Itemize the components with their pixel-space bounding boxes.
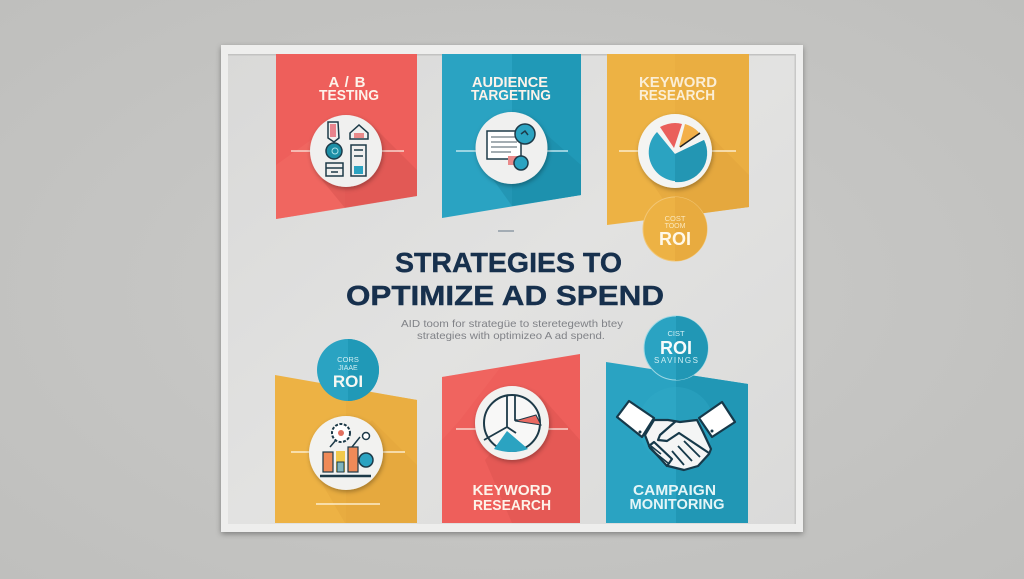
heading: A/B testing: A / B: [328, 74, 366, 91]
badge: ROI bottom left: JIAAE: [338, 365, 358, 372]
subtitle text: [401, 318, 624, 342]
poster frame: [221, 45, 803, 532]
panel: campaign monitoring: [606, 362, 748, 523]
badge: ROI top: [643, 197, 707, 261]
badge: ROI bottom left: CORS: [337, 355, 359, 364]
panel: A/B testing: [276, 54, 417, 219]
heading: keyword research bottom: RESEARCH: [473, 497, 551, 514]
title: STRATEGIES TO: [395, 247, 622, 278]
icon: segmented pie: [475, 386, 549, 460]
badge: ROI top: COST: [665, 214, 686, 223]
title: [346, 247, 664, 311]
panel: bottom yellow: [275, 375, 417, 523]
panel: audience targeting: [442, 54, 581, 218]
small tick above title: [498, 230, 514, 232]
heading: A/B testing: TESTING: [319, 87, 379, 104]
heading: campaign monitoring: MONITORING: [630, 496, 724, 513]
badge: ROI bottom left: [317, 339, 379, 401]
subtitle text: strategies with optimizeo A ad spend.: [417, 330, 605, 342]
heading: A/B testing: [319, 74, 379, 104]
heading: audience targeting: TARGETING: [471, 87, 551, 104]
icon: handshake: [617, 401, 735, 470]
subtitle text: AID toom for strategüe to steretegewth btey: [401, 318, 624, 330]
heading: audience targeting: [471, 74, 551, 104]
title: OPTIMIZE AD SPEND: [346, 280, 664, 311]
badge: ROI savings: [644, 316, 708, 380]
heading: audience targeting: AUDIENCE: [472, 74, 548, 91]
icon: pie chart: [638, 114, 712, 188]
badge: ROI top: ROI: [659, 229, 691, 249]
panel: keyword research bottom: [442, 354, 580, 523]
badge: ROI savings: CIST: [667, 329, 685, 338]
heading: keyword research bottom: [472, 482, 552, 514]
badge: ROI savings: SAVINGS: [654, 356, 698, 365]
badge: ROI bottom left: ROI: [333, 372, 363, 391]
heading: campaign monitoring: CAMPAIGN: [633, 482, 716, 499]
heading: keyword research top: KEYWORD: [639, 74, 717, 91]
heading: keyword research top: RESEARCH: [639, 87, 715, 104]
heading: keyword research top: [639, 74, 717, 104]
icon: audience document and head: [476, 112, 548, 184]
icon: A/B testing tools: [310, 115, 382, 187]
icon: bar chart and gear: [309, 416, 383, 490]
badge: ROI top: TOOM: [665, 223, 686, 230]
panel: keyword research top: [607, 54, 749, 225]
heading: campaign monitoring: [630, 482, 724, 513]
heading: keyword research bottom: KEYWORD: [472, 482, 552, 499]
badge: ROI savings: ROI: [660, 338, 692, 358]
